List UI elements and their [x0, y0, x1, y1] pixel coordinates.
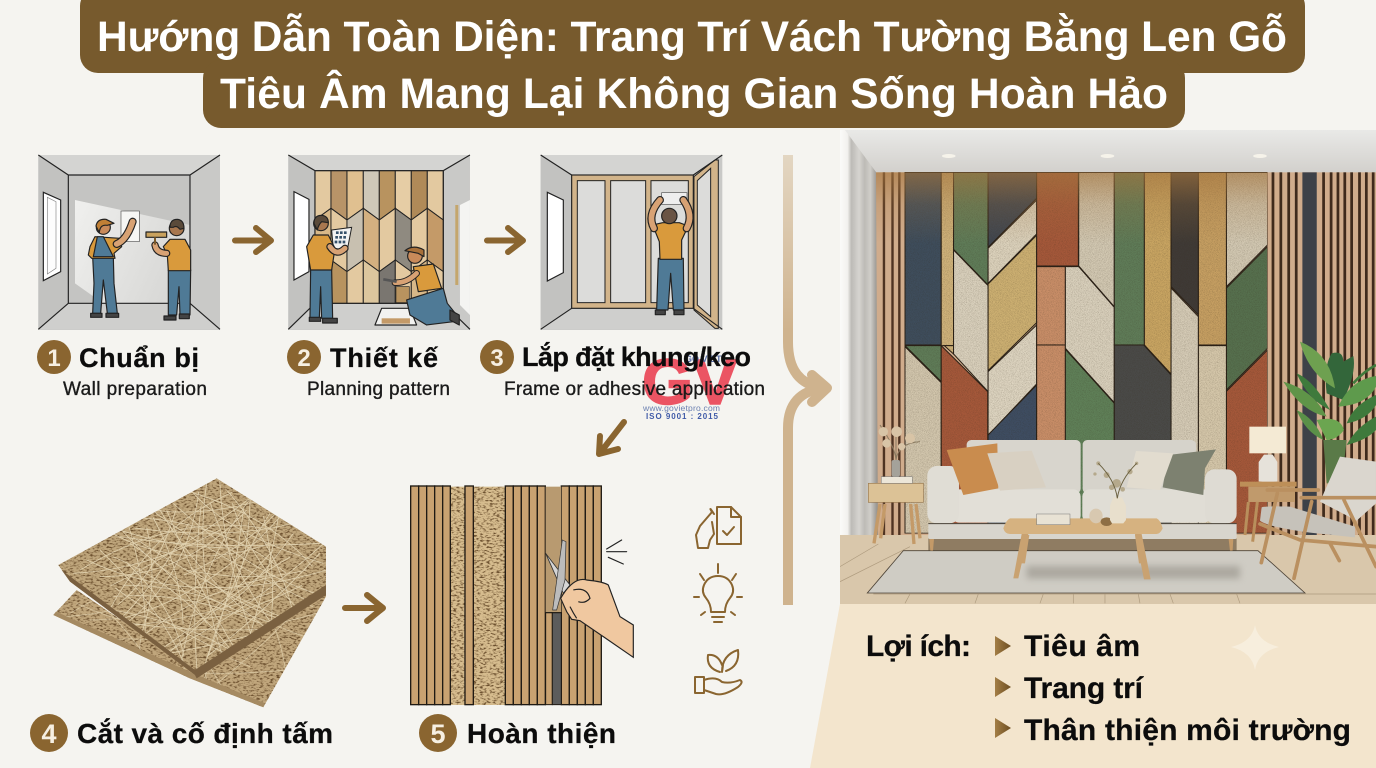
step 2 label: Thiết kế [330, 343, 439, 373]
floor and rug [840, 535, 1376, 605]
step 3 label: 3 [490, 345, 504, 372]
watermark logo: www.govietpro.com [642, 403, 720, 413]
icon: plant in hand [695, 650, 742, 694]
step 5 illustration: slat panel and hand trimming [411, 486, 633, 705]
table lamp [1249, 427, 1286, 453]
step 1 label: 1 [47, 345, 61, 372]
step 4 label: 4 [41, 719, 57, 749]
sparkle decoration [1231, 625, 1279, 670]
step 5 label [419, 714, 616, 752]
benefits list: Thân thiện môi trường [1024, 714, 1351, 747]
step 3 label: Frame or adhesive application [504, 379, 765, 400]
side table left [868, 483, 923, 502]
benefits list [995, 630, 1351, 747]
coffee table [1013, 534, 1151, 579]
arrow: step 3 to 4 [599, 422, 624, 454]
room photo: living room with wood wool wall [840, 130, 1376, 605]
wood wool fibres [73, 480, 326, 669]
step 2 label [287, 340, 450, 400]
step 1 label: Wall preparation [63, 379, 207, 400]
bracket arrow to room photo [788, 155, 827, 605]
plant leaves [1283, 342, 1376, 483]
step 3 label [480, 340, 765, 400]
curtain [840, 130, 878, 545]
feature wall panels [874, 154, 1376, 536]
title banner [80, 0, 1305, 128]
title banner: Hướng Dẫn Toàn Diện: Trang Trí Vách Tường Bằng Len Gỗ [97, 12, 1287, 61]
title banner: Tiêu Âm Mang Lại Không Gian Sống Hoàn Hảo [220, 69, 1168, 118]
cream benefits panel background [810, 604, 1376, 768]
step 5 label: 5 [430, 719, 446, 749]
sofa set [868, 425, 1237, 579]
step 1 illustration: wall preparation [38, 155, 220, 330]
ceiling [845, 130, 1376, 160]
step 2 label: Planning pattern [307, 379, 450, 400]
step 3 label: Lắp đặt khung/keo [522, 341, 751, 372]
step 4 illustration: wood wool panels [53, 478, 326, 708]
step 1 label: Chuẩn bị [79, 343, 199, 373]
arrow: step 1 to 2 [235, 228, 271, 252]
step 1 label [37, 340, 207, 400]
watermark logo: GV [642, 346, 737, 418]
arrow: step 2 to 3 [487, 228, 523, 252]
arrow: step 4 to 5 [345, 595, 383, 621]
step 5 label: Hoàn thiện [467, 718, 616, 749]
benefits heading: Lợi ích: [866, 630, 971, 663]
benefits list: Tiêu âm [1024, 630, 1140, 663]
sofa [929, 539, 1233, 551]
step 3 illustration: frame installation [541, 155, 722, 330]
side table [1240, 482, 1297, 487]
watermark logo: ISO 9001 : 2015 [646, 412, 719, 421]
step 2 label: 2 [297, 345, 311, 372]
plant, lamp and armchair [1240, 342, 1376, 578]
armchair [1320, 457, 1376, 521]
icon: document in hand [696, 507, 741, 548]
step 2 illustration: planning pattern [288, 155, 470, 330]
watermark logo: GO VIET [685, 354, 722, 364]
step 4 label [30, 714, 333, 752]
step 4 label: Cắt và cố định tấm [77, 718, 333, 749]
benefits list: Trang trí [1024, 672, 1145, 705]
icon: light bulb [694, 564, 742, 622]
